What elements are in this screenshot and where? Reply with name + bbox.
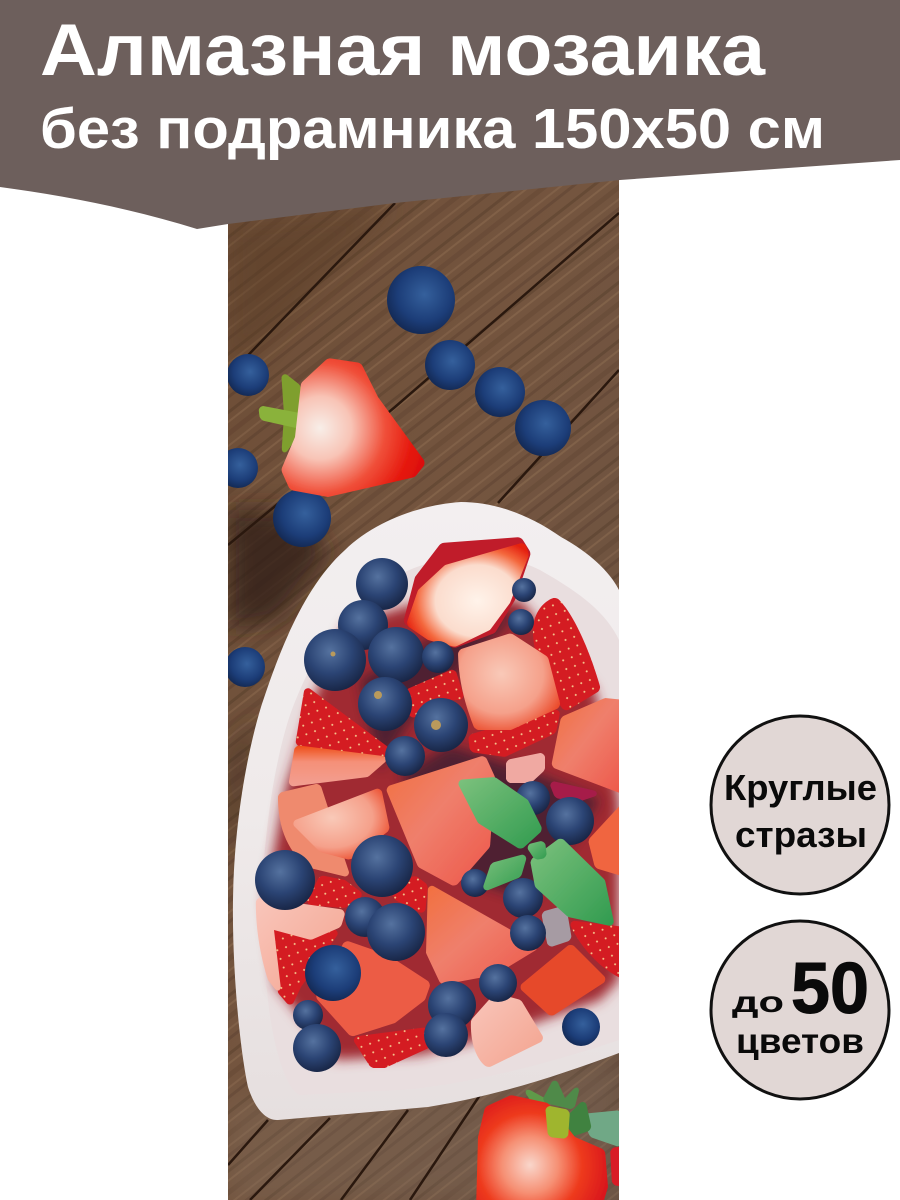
fruit: [281, 358, 426, 497]
wood background: [228, 170, 619, 1200]
strawberry: seeded behind center: [408, 670, 464, 718]
strawberry: triangle cut face: [288, 745, 391, 787]
strawberry: bottom seeded: [351, 1027, 431, 1068]
stem: [526, 1090, 549, 1104]
strawberry: cut top half: [458, 633, 561, 730]
strawberry: lower center pink red: [315, 940, 431, 1037]
badge: round rhinestones: стразы: [735, 814, 867, 855]
red sliver: [610, 1146, 625, 1187]
strawberry: halved large inner flesh: [406, 542, 529, 647]
strawberry: right coral small: [588, 806, 619, 876]
strawberry: upper halved: [258, 358, 426, 497]
strawberry: cut face center right: [468, 708, 561, 757]
seeded pieces behind: [308, 876, 362, 908]
leaves: [544, 1080, 579, 1109]
strawberry: center large: [385, 755, 495, 887]
photo panel: strawberries and blueberries in a white bowl on wood: [218, 170, 625, 1200]
fruit: [476, 1095, 608, 1200]
strawberry: seeded triangle: [295, 685, 391, 757]
dark leaf: [565, 1098, 592, 1138]
badge: up to 50 colours: [711, 921, 889, 1099]
badge: round rhinestones: [711, 716, 889, 894]
header banner: [0, 0, 900, 229]
bowl: [233, 502, 619, 1120]
badge: up to 50 colours: до: [732, 986, 784, 1019]
calyx: [545, 1105, 570, 1139]
strawberry: magenta: [550, 782, 597, 800]
strawberry: peach wedge: [471, 993, 545, 1068]
strawberry: right whole, seeded: [533, 597, 601, 712]
strawberry: left seeded: [274, 930, 338, 1005]
stem: [258, 406, 298, 428]
blueberries: [218, 266, 600, 1072]
mint leaves: [456, 777, 615, 927]
badge: up to 50 colours: цветов: [736, 1022, 864, 1061]
strawberry: small pink: [506, 752, 545, 783]
strawberry: lower left cut: [290, 787, 390, 860]
badge: up to 50 colours: 50: [791, 949, 869, 1029]
subtitle: без подрамника 150х50 см: [40, 97, 825, 161]
title: Алмазная мозаика: [40, 10, 767, 91]
grey piece: [542, 908, 572, 946]
strawberry: right lower: [520, 945, 606, 1016]
strawberries in bowl: [256, 537, 625, 1068]
strawberry: halved large with white flesh: [403, 537, 531, 648]
badge: round rhinestones: Круглые: [724, 767, 877, 808]
strawberry: right seeded lower: [570, 920, 619, 978]
strawberry: right coral: [552, 698, 619, 793]
teal leaf: [581, 1110, 622, 1148]
seeded pieces center: [392, 876, 428, 913]
strawberry: center cut: [426, 883, 541, 985]
sepal: [282, 374, 300, 452]
strawberry: peach behind left: [278, 783, 351, 878]
strawberry: left cut pink: [256, 897, 346, 998]
strawberry: bottom with green leaves: [476, 1076, 625, 1200]
